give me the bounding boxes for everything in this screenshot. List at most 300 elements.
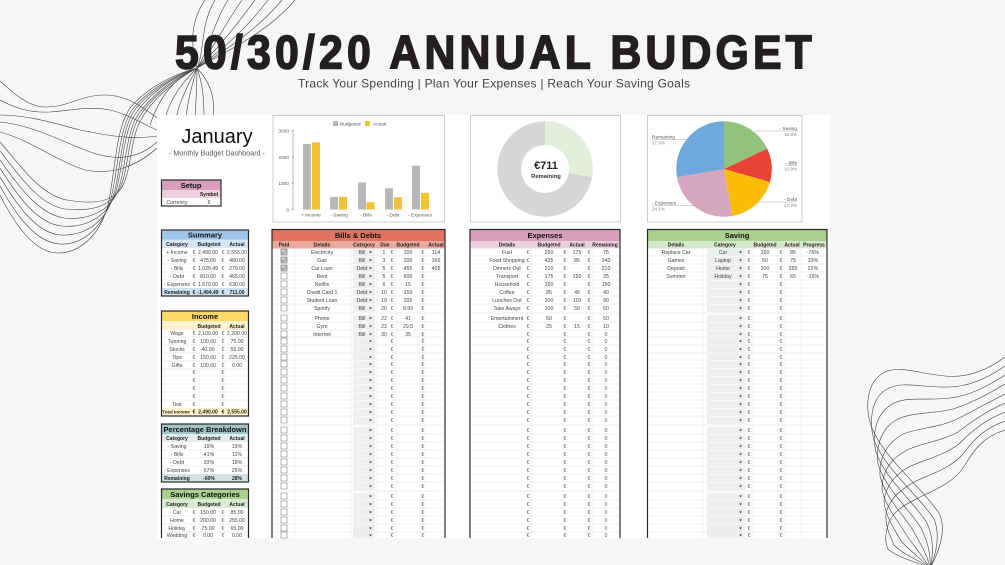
budgeted bars xyxy=(303,144,420,210)
panel: income: € xyxy=(222,363,225,369)
expense rows: 45 xyxy=(574,290,580,296)
panel: percentage breakdown: 11% xyxy=(232,452,242,458)
panel: saving: Details xyxy=(668,242,684,248)
expense rows: 85 xyxy=(574,258,580,264)
panel: summary: 711.00 xyxy=(229,290,245,296)
bill rows: Debt xyxy=(357,266,368,272)
panel: expenses xyxy=(470,230,620,539)
unchecked boxes xyxy=(281,273,287,538)
saving rows: 75 xyxy=(762,274,768,280)
panel: income: 150.00 xyxy=(200,355,216,361)
donut chart: remaining xyxy=(470,116,620,222)
panel: saving: Actual xyxy=(784,242,800,248)
bill rows: Bill xyxy=(359,274,365,280)
panel: bills and debts: Category xyxy=(353,242,375,248)
panel: income: 40.00 xyxy=(202,347,215,353)
spreadsheet dashboard xyxy=(157,115,830,539)
bill rows: Debt xyxy=(357,298,368,304)
checked boxes xyxy=(281,249,287,271)
panel: income: Tutoring xyxy=(168,339,187,345)
expense rows xyxy=(489,250,610,539)
saving rows: Laptop xyxy=(715,258,731,264)
chart legend: Budgeted xyxy=(340,122,361,128)
expense rows: 150 xyxy=(545,282,553,288)
bill rows: Credit Card 1 xyxy=(307,290,338,296)
panel: percentage breakdown: 19% xyxy=(204,444,215,450)
panel: income: 0.00 xyxy=(232,363,242,369)
saving rows: 50 xyxy=(762,258,768,264)
saving rows: Summer xyxy=(666,274,686,280)
panel: savings categories: Holiday xyxy=(168,526,186,532)
panel: summary: -1,494.49 xyxy=(197,290,219,296)
bill rows: Student Loan xyxy=(307,298,338,304)
month heading: January xyxy=(181,126,253,148)
panel: savings categories: Wedding xyxy=(167,533,187,539)
panel: expenses: Remaining xyxy=(592,242,618,248)
panel: percentage breakdown: 18% xyxy=(232,460,243,466)
expense rows: Lunches Out xyxy=(492,298,522,304)
panel: summary: - Expenses xyxy=(164,282,190,288)
panel: summary: Category xyxy=(166,242,188,248)
panel: summary: Remaining xyxy=(164,290,190,296)
bill rows: 41 xyxy=(405,316,411,322)
saving rows: 75 xyxy=(790,258,796,264)
expense rows: 10 xyxy=(603,324,609,330)
decorative wave: bottom right xyxy=(868,357,1005,565)
expense rows: 175 xyxy=(545,274,553,280)
pie labels: - Saving xyxy=(779,126,797,132)
panel: income: 2,555.00 xyxy=(227,410,247,416)
panel: summary: 2,555.00 xyxy=(227,250,247,256)
panel: savings categories: 255.00 xyxy=(229,518,245,524)
panel: income: 75.00 xyxy=(231,339,244,345)
euro columns: €€€€€€€€€€€€€€€€€€€€€€€€€€€€€€€€€€€€ xyxy=(588,250,591,539)
panel: summary: € xyxy=(222,290,225,296)
panel: income: Wage xyxy=(170,331,184,337)
panel: summary: 2,490.00 xyxy=(198,250,218,256)
panel: summary: 465.00 xyxy=(229,274,245,280)
panel: summary: € xyxy=(193,274,196,280)
chart axis: 1000 xyxy=(278,181,289,187)
panel: saving: Category xyxy=(714,242,736,248)
pie labels: Remaining xyxy=(652,134,675,140)
bar chart xyxy=(273,116,444,222)
donut chart: remaining: €711 xyxy=(534,160,558,172)
panel: setup: Currency xyxy=(166,200,188,206)
panel: summary: € xyxy=(222,282,225,288)
panel: income xyxy=(162,311,248,416)
panel: income: € xyxy=(193,347,196,353)
pie labels: - Debt xyxy=(784,197,798,203)
expense rows: 25 xyxy=(546,324,552,330)
dropdown cells xyxy=(707,249,745,538)
panel: income: € xyxy=(193,402,196,408)
pie labels: 27.8% xyxy=(652,140,665,146)
panel: income: Tips xyxy=(172,355,182,361)
panel: summary: € xyxy=(193,250,196,256)
bill rows: Internet xyxy=(313,332,331,338)
panel: setup: Setup xyxy=(181,181,202,190)
saving rows: 65 xyxy=(790,274,796,280)
bill rows: 1 xyxy=(383,250,386,256)
panel: summary: 480.00 xyxy=(229,258,245,264)
expense rows: 210 xyxy=(602,266,610,272)
euro columns xyxy=(748,250,783,539)
saving rows: Car xyxy=(719,250,727,256)
panel: income: € xyxy=(193,363,196,369)
expense rows: 250 xyxy=(545,250,553,256)
panel: savings categories: € xyxy=(193,526,196,532)
saving rows: Deposit xyxy=(667,266,685,272)
bill rows: 30 xyxy=(381,332,387,338)
panel: savings categories: 0.00 xyxy=(232,533,242,539)
panel: savings categories: € xyxy=(222,510,225,516)
dropdown arrows xyxy=(369,252,372,536)
bill rows: 10 xyxy=(381,290,387,296)
chart category labels: - Saving xyxy=(330,212,348,218)
expense rows: 25 xyxy=(603,274,609,280)
panel: income: € xyxy=(193,331,196,337)
panel: summary: - Debt xyxy=(170,274,185,280)
chart legend xyxy=(333,121,386,128)
bill rows: Car Loan xyxy=(311,266,333,272)
panel: summary: € xyxy=(222,274,225,280)
month heading xyxy=(169,126,266,158)
euro columns: €€€€€€€€€€€€€€€€€€€€€€€€€€€€€€€€€€€€ xyxy=(527,250,530,539)
panel: summary: 475.00 xyxy=(200,258,216,264)
panel: setup: Symbol xyxy=(200,192,219,198)
pie chart xyxy=(648,116,802,222)
expense rows: Coffee xyxy=(499,290,515,296)
bill rows: Electricity xyxy=(311,250,333,256)
expense rows: 340 xyxy=(602,258,610,264)
saving rows: 22% xyxy=(808,266,819,272)
panel: income: 2,490.00 xyxy=(198,410,218,416)
panel: income: 100.00 xyxy=(200,339,216,345)
panel: savings categories: 85.00 xyxy=(231,510,244,516)
expense rows: 40 xyxy=(603,290,609,296)
panel: percentage breakdown: Percentage Breakdown xyxy=(164,425,247,434)
saving rows: Home xyxy=(716,266,730,272)
panel: saving: Progress xyxy=(803,242,825,248)
bill rows: Bill xyxy=(359,306,365,312)
panel: savings categories: 0.00 xyxy=(203,533,213,539)
panel: income: Stocks xyxy=(169,347,185,353)
expense rows: 150 xyxy=(602,282,610,288)
expense rows: 75 xyxy=(603,250,609,256)
expense rows: 50 xyxy=(574,306,580,312)
euro columns xyxy=(527,250,591,539)
panel: percentage breakdown: Category xyxy=(166,436,188,442)
expense rows: 90 xyxy=(603,298,609,304)
bill rows: 200 xyxy=(404,258,412,264)
panel: savings categories: 65.00 xyxy=(231,526,244,532)
pie labels: - Bills xyxy=(785,160,798,166)
saving rows: 150 xyxy=(761,250,769,256)
saving rows xyxy=(662,250,819,280)
donut chart: remaining: Remaining xyxy=(531,174,561,180)
saving rows: Games xyxy=(668,258,685,264)
saving rows: 255 xyxy=(789,266,797,272)
saving rows: -76% xyxy=(807,250,819,256)
panel: income: Test xyxy=(172,402,182,408)
bill rows: 455 xyxy=(404,266,412,272)
expense rows: 150 xyxy=(573,274,581,280)
bill rows: 29.5 xyxy=(403,324,413,330)
panel: income: Income xyxy=(192,312,218,321)
expense rows: 50 xyxy=(603,306,609,312)
panel: percentage breakdown: - Bills xyxy=(171,452,184,458)
panel: income: € xyxy=(222,410,225,416)
expense rows: Transport xyxy=(496,274,519,280)
panel: expenses: Actual xyxy=(569,242,585,248)
pie labels: 17.2% xyxy=(784,203,797,208)
panel: savings categories: Category xyxy=(166,502,188,508)
expense rows: 50 xyxy=(603,316,609,322)
bill rows: Netflix xyxy=(315,282,330,288)
euro columns: €€€€€€€€€€€€€€€€€€€€€€€€€€€€€€€€€€€€ xyxy=(780,250,783,539)
bill rows: Phone xyxy=(314,316,330,322)
panel: savings categories: Car xyxy=(173,510,181,516)
bill rows: Bill xyxy=(359,282,365,288)
panel: bills and debts: Bills & Debts xyxy=(335,231,381,240)
title: 50/30/20 ANNUAL BUDGET xyxy=(175,26,816,79)
panel: summary: 810.00 xyxy=(200,274,216,280)
decorative wave: top left xyxy=(0,0,295,253)
bill rows: Gym xyxy=(317,324,327,330)
panel: bills and debts: Actual xyxy=(428,242,444,248)
panel: income: 55.00 xyxy=(231,347,244,353)
expense rows: 175 xyxy=(573,250,581,256)
expense rows: 00000000000000000000000000 xyxy=(605,332,608,539)
panel: percentage breakdown: 25% xyxy=(232,468,243,474)
expense rows: Entertainment xyxy=(491,316,524,322)
panel: percentage breakdown: 67% xyxy=(204,468,215,474)
panel: summary: 1,029.49 xyxy=(198,266,218,272)
pie labels: - Expenses xyxy=(652,200,677,206)
bill rows: 19 xyxy=(381,298,387,304)
bill rows: 5 xyxy=(383,274,386,280)
bill rows: 205 xyxy=(404,298,412,304)
bill rows: 22 xyxy=(381,316,387,322)
dropdown cells xyxy=(353,249,375,538)
chart axis xyxy=(278,128,294,214)
panel: summary: € xyxy=(222,250,225,256)
bill rows: 15 xyxy=(405,282,411,288)
panel: income: €€€€€€€€ xyxy=(193,370,225,400)
panel: summary xyxy=(162,230,248,296)
saving rows: 33% xyxy=(808,258,819,264)
chart axis: 3000 xyxy=(278,128,289,134)
panel: summary: € xyxy=(193,258,196,264)
month heading: - Monthly Budget Dashboard - xyxy=(169,148,266,158)
bill rows: 23 xyxy=(381,324,387,330)
panel: savings categories: € xyxy=(222,533,225,539)
saving rows: -15% xyxy=(807,274,819,280)
expense rows: Fuel xyxy=(502,250,512,256)
panel: summary: € xyxy=(222,258,225,264)
chart category labels: - Bills xyxy=(360,212,372,218)
panel: percentage breakdown: Actual xyxy=(229,436,245,442)
expense rows: 210 xyxy=(545,266,553,272)
panel: summary: € xyxy=(193,290,196,296)
bill rows: 114 xyxy=(432,250,440,256)
panel: percentage breakdown: 33% xyxy=(204,460,215,466)
chart legend: Actual xyxy=(373,122,386,128)
bill rows: 455 xyxy=(432,266,440,272)
panel: bills and debts: Details xyxy=(314,242,330,248)
bill rows: Bill xyxy=(359,250,365,256)
bill rows: 165 xyxy=(432,258,440,264)
panel: percentage breakdown: - Expenses xyxy=(164,468,190,474)
panel: bills and debts: Paid xyxy=(279,242,289,248)
panel: bills and debts xyxy=(272,230,445,539)
panel: savings categories: Home xyxy=(170,518,184,524)
bill rows xyxy=(307,250,440,338)
subtitle: Track Your Spending | Plan Your Expenses | Reach Your Saving Goals xyxy=(298,76,690,90)
panel: income: € xyxy=(222,331,225,337)
panel: saving: Saving xyxy=(725,231,750,240)
panel: income: € xyxy=(222,347,225,353)
euro columns xyxy=(391,250,425,539)
actual bars xyxy=(312,142,429,210)
panel: income: Total Income xyxy=(162,410,190,414)
panel: setup: € xyxy=(208,200,211,206)
bill rows: Bill xyxy=(359,316,365,322)
panel: savings categories: Budgeted xyxy=(197,502,221,508)
bill rows: 600 xyxy=(404,274,412,280)
pie labels: 24.1% xyxy=(652,206,665,212)
panel: summary: - Bills xyxy=(171,266,184,272)
panel: summary: 279.00 xyxy=(229,266,245,272)
euro columns: €€€€€€€€€€€€€€€€€€€€€€€€€€€€€€€€€€€€ xyxy=(564,250,567,539)
bill rows: 100 xyxy=(404,250,412,256)
panel: income: € xyxy=(222,355,225,361)
panel: income: Actual xyxy=(229,324,245,330)
panel: expenses: Details xyxy=(499,242,515,248)
panel: summary: € xyxy=(193,266,196,272)
panel: savings categories: € xyxy=(222,518,225,524)
panel: income: 225.00 xyxy=(229,355,245,361)
expense rows: 425 xyxy=(545,258,553,264)
panel: summary: € xyxy=(222,266,225,272)
euro columns: €€€€€€€€€€€€€€€€€€€€€€€€€€€€€€€€€€€€ xyxy=(391,250,394,539)
pie labels: 18.8% xyxy=(784,132,797,137)
panel: income: Gifts xyxy=(172,363,183,369)
bill rows: 5 xyxy=(383,266,386,272)
expense rows: Food Shopping xyxy=(489,258,525,264)
expense rows: 50 xyxy=(546,316,552,322)
panel: savings categories: 150.00 xyxy=(200,510,216,516)
saving rows: Holiday xyxy=(714,274,732,280)
panel: savings categories: € xyxy=(193,510,196,516)
panel: summary: - Saving xyxy=(167,258,187,264)
panel: savings categories: 200.00 xyxy=(200,518,216,524)
panel: saving: Budgeted xyxy=(753,242,777,248)
panel: income: € xyxy=(193,355,196,361)
bill rows: Bill xyxy=(359,258,365,264)
expense rows: 110 xyxy=(573,298,581,304)
panel: savings categories: 75.00 xyxy=(202,526,215,532)
panel: income: 2,200.00 xyxy=(227,331,247,337)
saving rows: Replace Car xyxy=(662,250,691,256)
panel: income: € xyxy=(222,402,225,408)
bill rows: 6 xyxy=(383,282,386,288)
panel: saving xyxy=(648,230,827,539)
expense rows: 100 xyxy=(545,306,553,312)
chart category labels xyxy=(301,212,433,218)
expense rows: 200 xyxy=(545,298,553,304)
bill rows: Debt xyxy=(357,290,368,296)
panel: savings categories xyxy=(162,489,248,539)
expense rows: Household xyxy=(495,282,520,288)
bill rows: Spotify xyxy=(314,306,330,312)
panel: percentage breakdown: -60% xyxy=(203,476,215,482)
bill rows: Bill xyxy=(359,332,365,338)
panel: percentage breakdown: Budgeted xyxy=(197,436,221,442)
panel: summary: Summary xyxy=(188,230,223,240)
dropdown arrows xyxy=(739,252,742,536)
expense rows: Take Aways xyxy=(493,306,521,312)
pie labels xyxy=(652,126,798,212)
panel: income: € xyxy=(193,410,196,416)
panel: summary: Budgeted xyxy=(197,242,221,248)
panel: percentage breakdown: Remaining xyxy=(164,476,190,482)
saving rows: 85 xyxy=(790,250,796,256)
chart axis: 0 xyxy=(286,208,289,214)
panel: expenses: Budgeted xyxy=(537,242,561,248)
panel: expenses: Expenses xyxy=(527,231,563,240)
chart category labels: - Debt xyxy=(386,212,400,218)
expense rows: 15 xyxy=(574,324,580,330)
panel: savings categories: Savings Categories xyxy=(170,490,240,499)
pie labels: 10.9% xyxy=(784,166,797,172)
bill rows: 35 xyxy=(405,332,411,338)
euro columns: €€€€€€€€€€€€€€€€€€€€€€€€€€€€€€€€€€€€ xyxy=(422,250,425,539)
bill rows: 150 xyxy=(404,290,412,296)
panel: percentage breakdown: - Saving xyxy=(167,444,187,450)
bill rows: Rent xyxy=(317,274,328,280)
panel: summary: Actual xyxy=(229,242,245,248)
expense rows: 85 xyxy=(546,290,552,296)
panel: percentage breakdown: 41% xyxy=(204,452,215,458)
panel: percentage breakdown: - Debt xyxy=(170,460,185,466)
bill rows: 3 xyxy=(383,258,386,264)
panel: percentage breakdown: 19% xyxy=(232,444,243,450)
panel: income: € xyxy=(222,339,225,345)
panel: savings categories: € xyxy=(222,526,225,532)
expense rows: Clothes xyxy=(498,324,516,330)
chart category labels: - Expenses xyxy=(408,212,433,218)
panel: savings categories: Actual xyxy=(229,502,245,508)
euro columns: €€€€€€€€€€€€€€€€€€€€€€€€€€€€€€€€€€€€ xyxy=(748,250,751,539)
bill rows: 20 xyxy=(381,306,387,312)
panel: income: € xyxy=(193,339,196,345)
panel: bills and debts: Budgeted xyxy=(396,242,420,248)
panel: savings categories: € xyxy=(193,533,196,539)
panel: summary: + Income xyxy=(166,250,188,256)
chart axis: 2000 xyxy=(278,155,289,161)
bill rows: Bill xyxy=(359,324,365,330)
panel: income: 2,100.00 xyxy=(198,331,218,337)
bill rows: 9.99 xyxy=(403,306,413,312)
panel: summary: 630.00 xyxy=(229,282,245,288)
panel: income: 100.00 xyxy=(200,363,216,369)
panel: summary: € xyxy=(193,282,196,288)
panel: summary: 1,670.00 xyxy=(198,282,218,288)
panel: percentage breakdown: 28% xyxy=(232,476,243,482)
saving rows: 200 xyxy=(761,266,769,272)
